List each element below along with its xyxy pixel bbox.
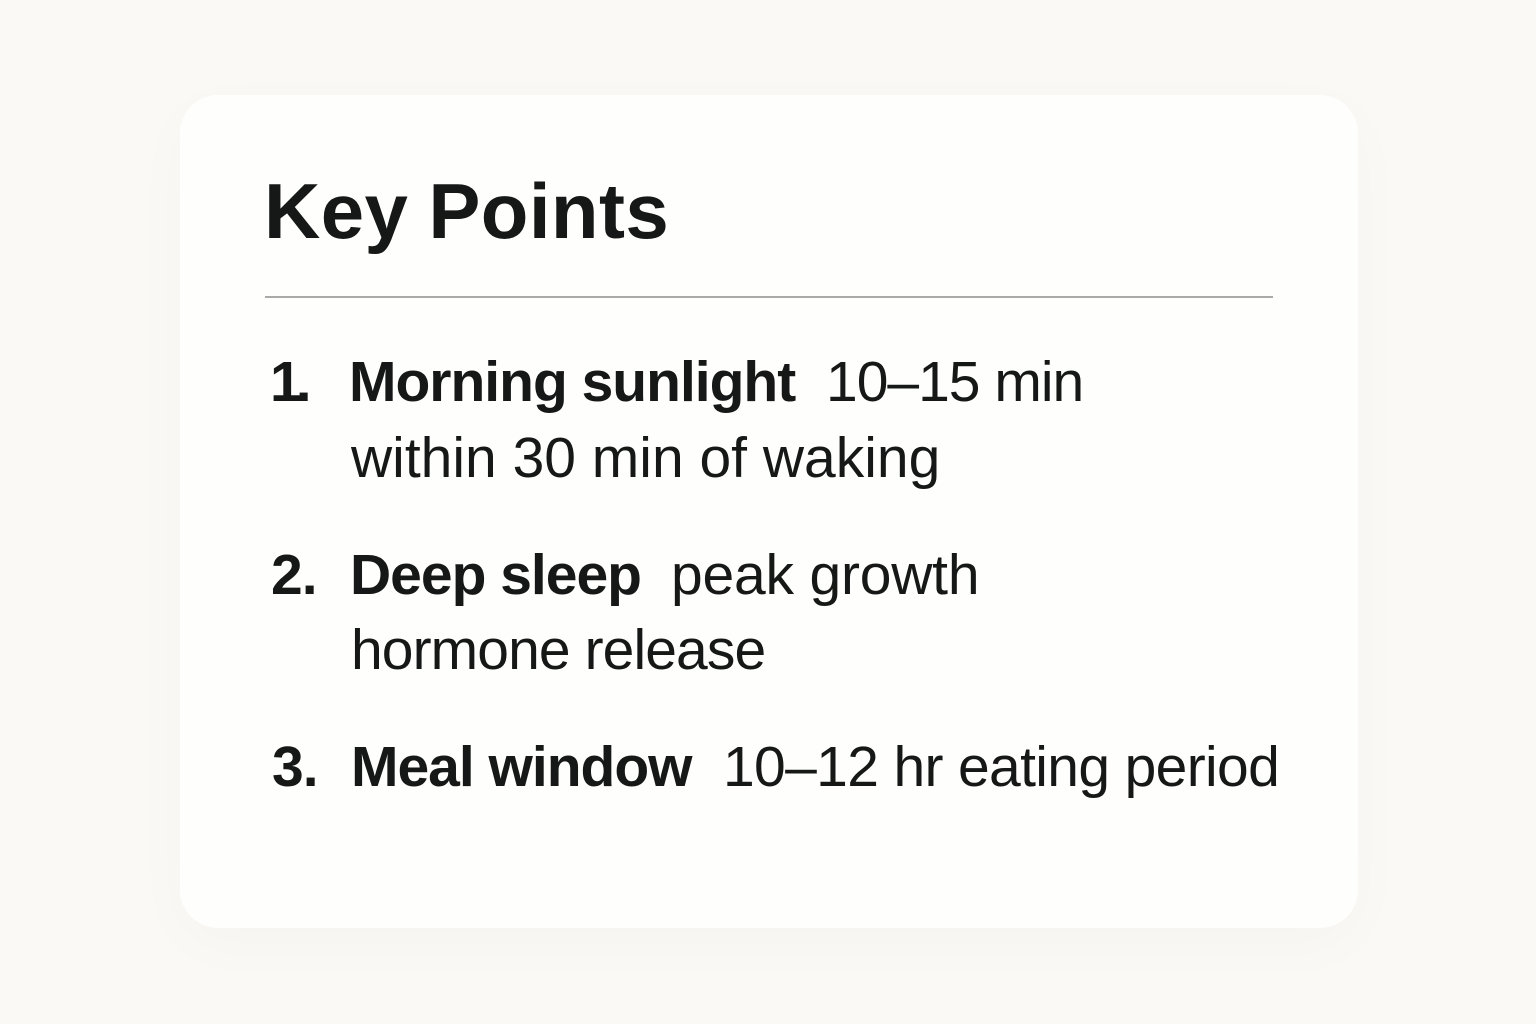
item 3 number: 3. (272, 735, 318, 799)
item 1 second line: within 30 min of waking (351, 426, 940, 490)
item 1 bold label: Morning sunlight (349, 350, 795, 414)
item 1 number: 1. (270, 350, 306, 414)
list item 1 (270, 350, 1083, 490)
item 2 detail: peak growth (671, 543, 979, 607)
item 2 bold label: Deep sleep (350, 543, 641, 607)
list item 3 (272, 735, 1279, 799)
title: Key Points (264, 167, 669, 255)
list item 2 (271, 543, 979, 682)
item 3 detail: 10–12 hr eating period (723, 735, 1279, 799)
item 1 detail: 10–15 min (826, 350, 1083, 414)
panel: key points card (180, 95, 1358, 928)
item 2 second line: hormone release (351, 618, 765, 682)
item 2 number: 2. (271, 543, 317, 607)
item 3 bold label: Meal window (351, 735, 692, 799)
